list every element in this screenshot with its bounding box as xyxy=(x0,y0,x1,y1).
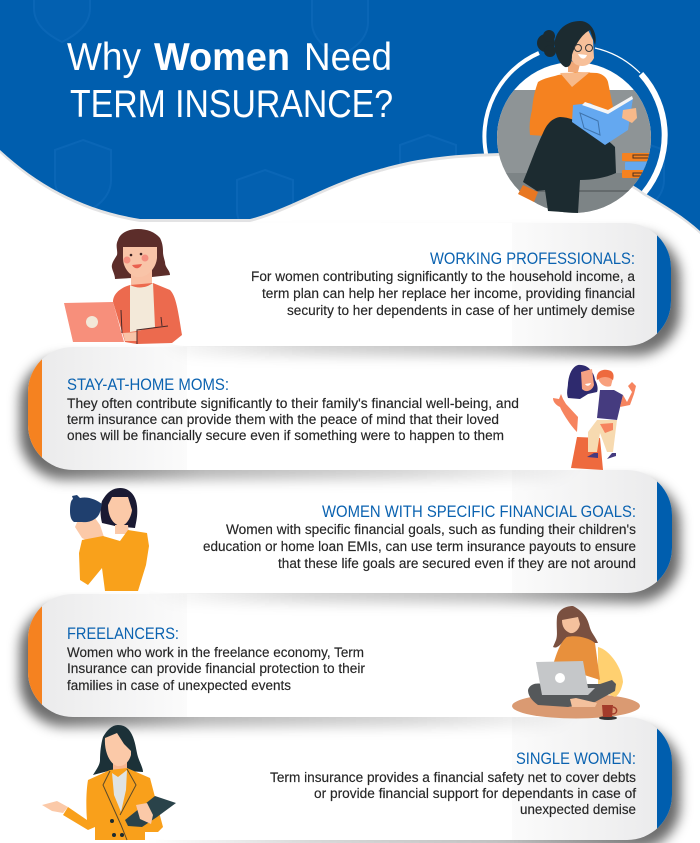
card 1 text: WORKING PROFESSIONALS: xyxy=(430,249,635,268)
title: Why xyxy=(67,36,141,79)
card 4 freelancers xyxy=(20,594,618,727)
card 3 text: WOMEN WITH SPECIFIC FINANCIAL GOALS: xyxy=(322,502,636,521)
illustration: woman with piggy bank xyxy=(70,488,149,591)
card 5 text: or provide financial support for dependants in case of xyxy=(314,786,636,801)
card 2 stay-at-home moms xyxy=(20,347,618,480)
card 5 text: unexpected demise xyxy=(520,802,636,817)
card 1 text xyxy=(251,249,635,318)
card 1 working professionals xyxy=(140,223,680,356)
card 1 text: security to her dependents in case of her untimely demise xyxy=(287,303,635,318)
card 5 single women xyxy=(120,717,680,843)
card 2 text: STAY-AT-HOME MOMS: xyxy=(67,375,229,394)
title: Need xyxy=(304,36,392,79)
card 5 text: SINGLE WOMEN: xyxy=(516,749,636,768)
illustration: freelancer on rug xyxy=(512,606,640,720)
card 1 text: For women contributing significantly to the household income, a xyxy=(251,269,635,284)
header background xyxy=(0,0,700,244)
card 2 text: term insurance can provide them with the peace of mind that their loved xyxy=(67,412,499,427)
illustration: woman with laptop xyxy=(64,229,182,344)
card 2 text: They often contribute significantly to their family's financial well-being, and xyxy=(67,396,519,411)
title: TERM INSURANCE? xyxy=(70,83,393,126)
card 4 text xyxy=(67,624,365,693)
title xyxy=(67,36,393,126)
card 3 text xyxy=(203,502,636,571)
illustration: business woman xyxy=(42,725,176,840)
card 3 financial goals xyxy=(120,470,680,603)
card 1 text: term plan can help her replace her income, providing financial xyxy=(262,286,635,301)
ring around illustration xyxy=(484,48,665,193)
card 2 text xyxy=(67,375,519,443)
card 2 text: ones will be financially secure even if something were to happen to them xyxy=(67,428,504,443)
card 3 text: education or home loan EMIs, can use term insurance payouts to ensure xyxy=(203,539,636,554)
card 5 text: Term insurance provides a financial safety net to cover debts xyxy=(270,770,636,785)
card 3 text: Women with specific financial goals, such as funding their children's xyxy=(226,522,636,537)
card 5 text xyxy=(270,749,636,817)
illustration: woman reading xyxy=(497,21,651,213)
illustration: mom and child xyxy=(553,365,636,470)
card 4 text: Women who work in the freelance economy, Term xyxy=(67,645,364,660)
card 4 text: FREELANCERS: xyxy=(67,624,179,643)
title: Women xyxy=(154,36,290,79)
card 4 text: families in case of unexpected events xyxy=(67,678,291,693)
card 4 text: Insurance can provide financial protection to their xyxy=(67,661,365,676)
card 3 text: that these life goals are secured even if they are not around xyxy=(278,556,636,571)
